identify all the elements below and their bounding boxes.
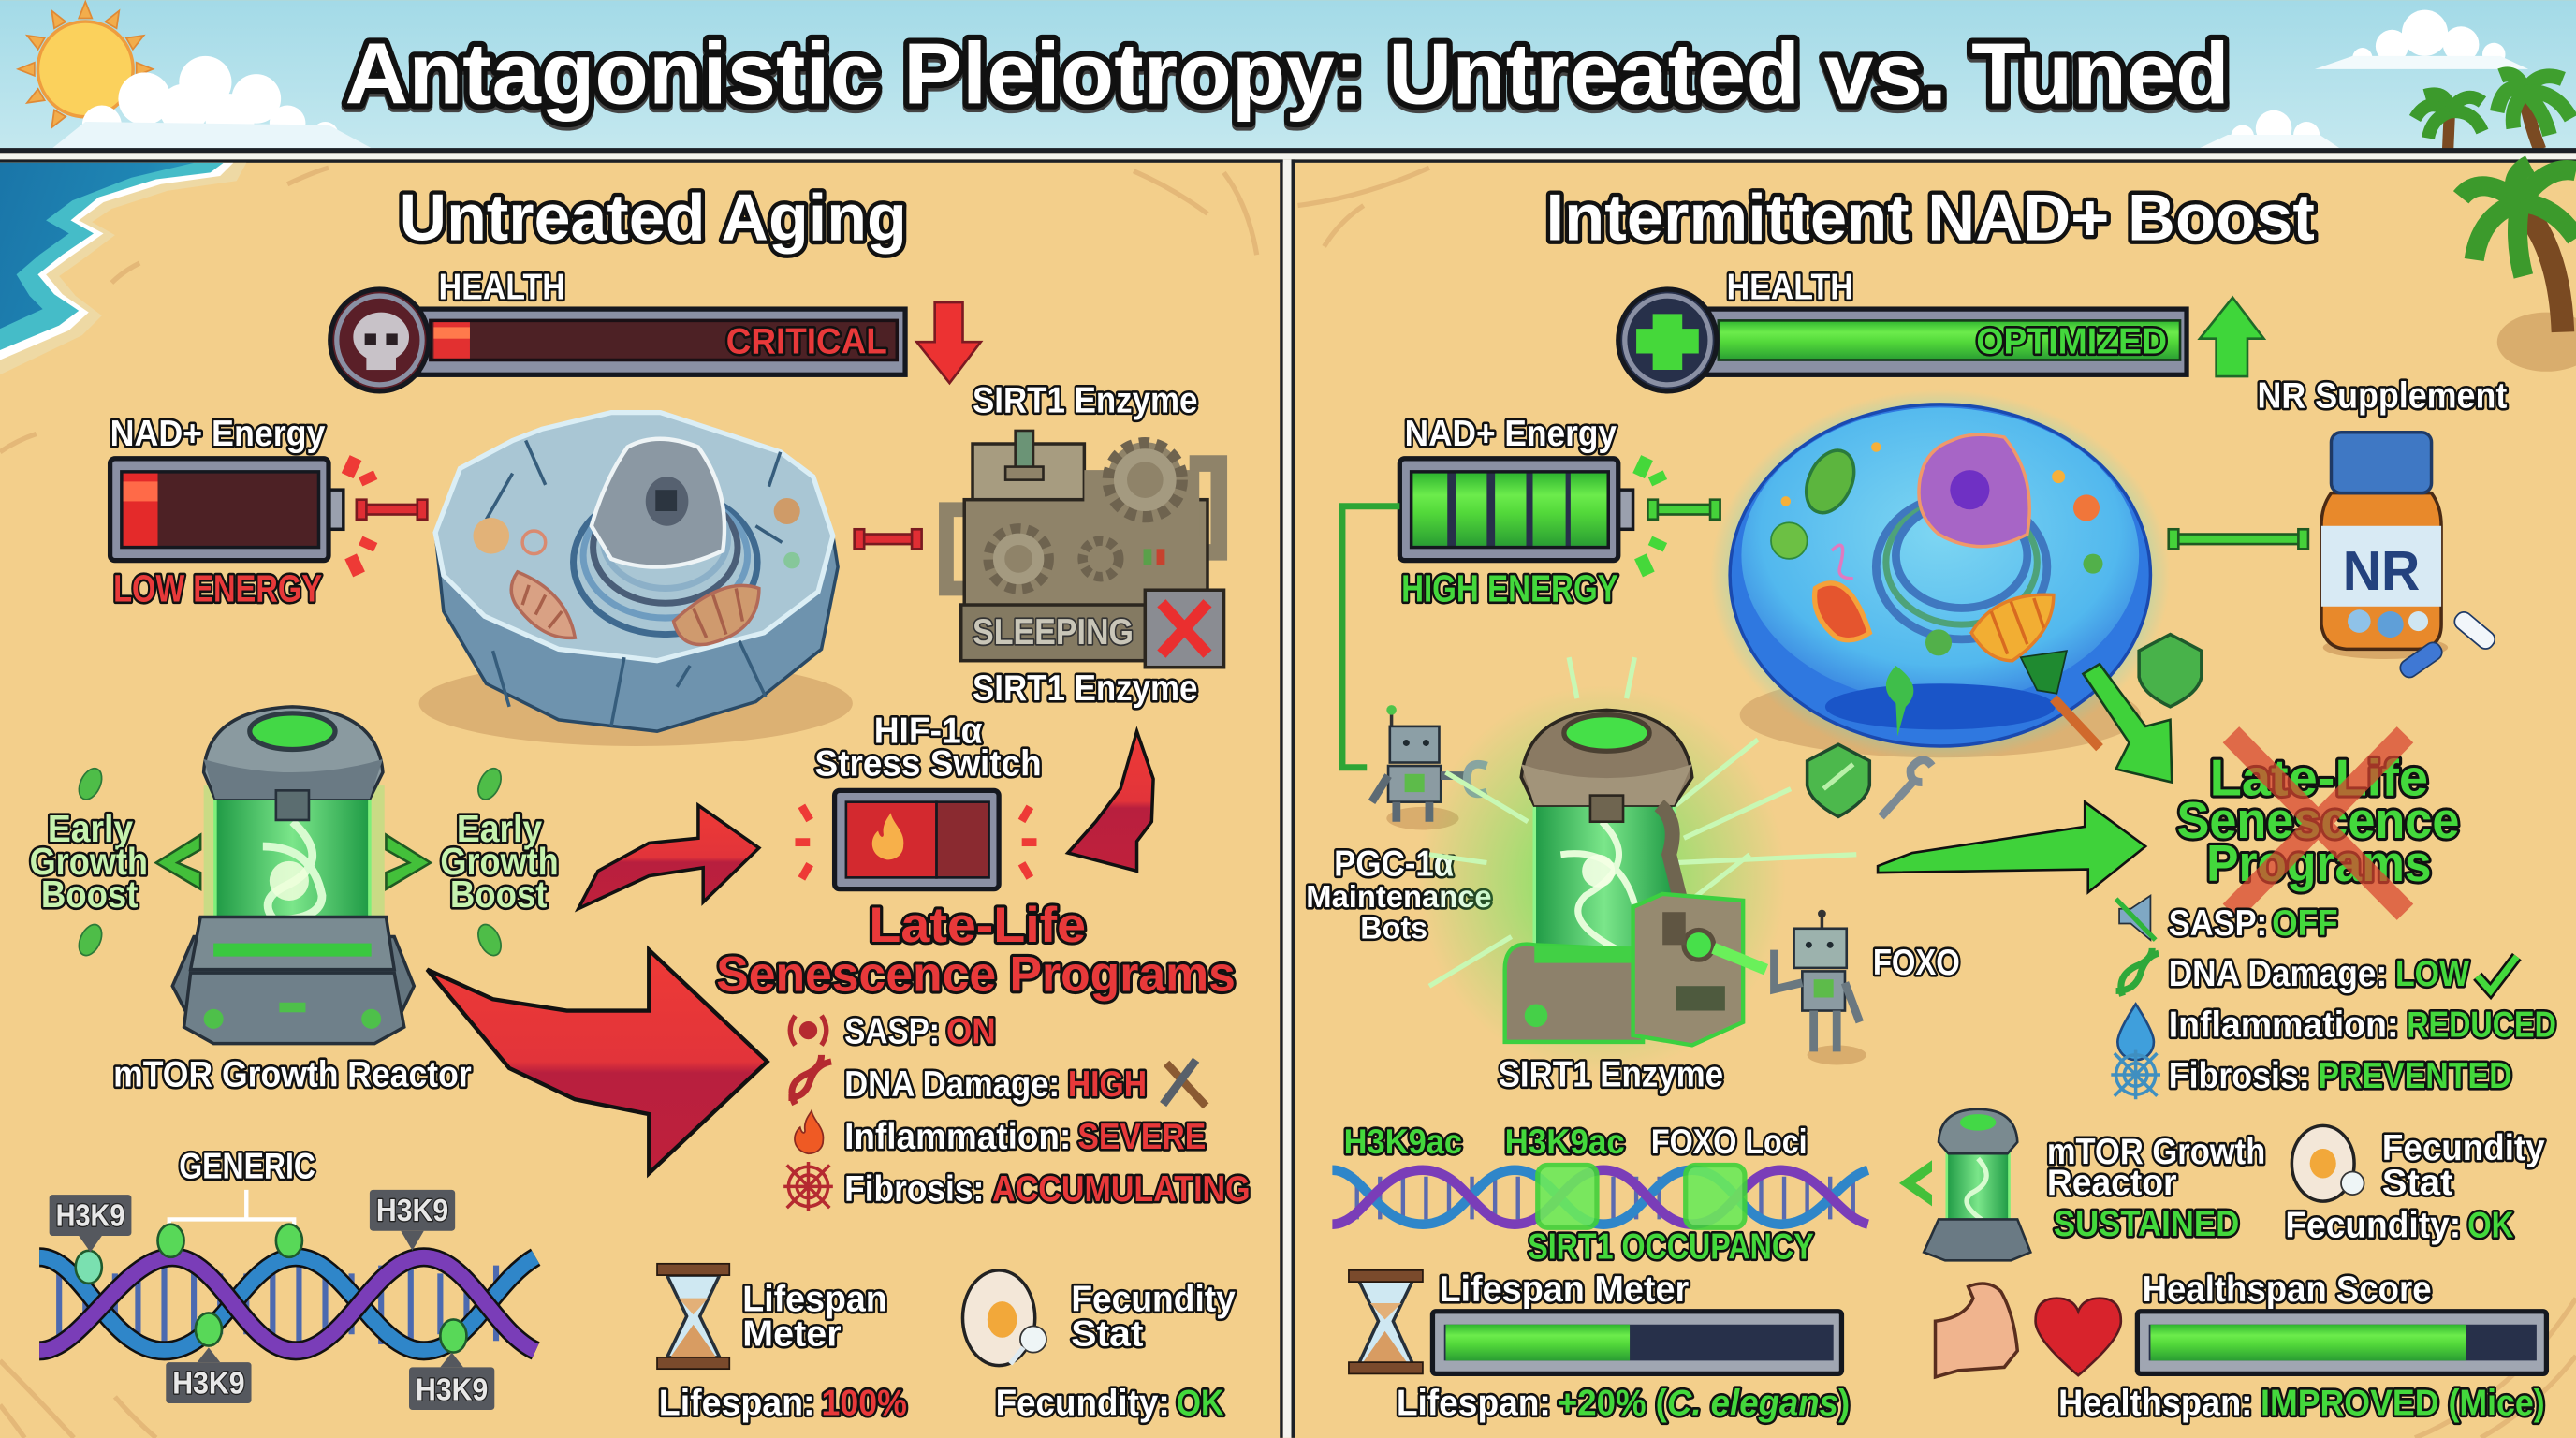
panel: untreated aging bbox=[0, 163, 1280, 1438]
dna: generic marks: GENERIC bbox=[179, 1147, 315, 1187]
label: PGC-1a maintenance bots: PGC-1α bbox=[1334, 844, 1455, 885]
cell: healthy bbox=[1710, 389, 2170, 761]
arrow: curved down to switch bbox=[1068, 731, 1153, 871]
health bar: optimized: HEALTH bbox=[1727, 268, 1853, 308]
row: SASP: SASP: bbox=[2169, 903, 2267, 944]
switch: HIF-1a bbox=[795, 790, 1036, 889]
label: early growth boost left: Early bbox=[48, 807, 134, 850]
arrow: diagonal green bbox=[2083, 664, 2172, 783]
bottle: NR supplement: NR Supplement bbox=[2258, 375, 2507, 416]
bottle: NR supplement bbox=[2258, 375, 2507, 681]
icons: leaves bbox=[75, 765, 505, 959]
panel: header sky bbox=[0, 0, 2576, 150]
icon: hourglass right bbox=[1349, 1270, 1423, 1373]
label: HIF-1a stress switch: HIF-1α bbox=[874, 711, 983, 751]
icon: water drop bbox=[2117, 1005, 2154, 1060]
label: early growth boost right bbox=[440, 807, 559, 916]
arrow: large red to senescence bbox=[427, 950, 768, 1173]
label: early growth boost left bbox=[30, 807, 148, 916]
cell: damaged bbox=[419, 413, 853, 746]
label: SIRT1 Enzyme bottom: SIRT1 Enzyme bbox=[973, 668, 1197, 709]
battery: high NAD+ energy: NAD+ Energy bbox=[1405, 414, 1617, 454]
list: senescence status bbox=[783, 1012, 1251, 1211]
stat: fecundity: OK bbox=[1177, 1383, 1224, 1423]
icon: egg right bbox=[2291, 1125, 2364, 1201]
row: inflammation: SEVERE bbox=[1077, 1117, 1206, 1157]
battery: high NAD+ energy: HIGH ENERGY bbox=[1401, 567, 1618, 610]
label: mTOR growth reactor sustained bbox=[2047, 1132, 2265, 1244]
row: fibrosis bbox=[2169, 1056, 2512, 1096]
label: FOXO: FOXO bbox=[1873, 943, 1960, 983]
connector: battery to maintenance bots bbox=[1342, 506, 1399, 768]
icon: check bbox=[2478, 957, 2517, 990]
icon: plus bbox=[1636, 314, 1699, 370]
icon: hammer bbox=[1164, 1060, 1206, 1106]
label: fecundity stat: Fecundity bbox=[1071, 1280, 1236, 1320]
icon: egg left bbox=[962, 1270, 1046, 1366]
health bar: critical: CRITICAL bbox=[726, 321, 887, 361]
heading: late-life senescence programs crossed bbox=[2177, 735, 2459, 912]
chevron: right growth bbox=[386, 835, 431, 889]
icon: web bbox=[2111, 1050, 2160, 1099]
meter: healthspan: Healthspan: bbox=[2058, 1383, 2252, 1423]
icon: flame in switch bbox=[872, 813, 903, 859]
tag: H3K9 one bbox=[50, 1195, 131, 1253]
label: fecundity stat: Stat bbox=[2382, 1163, 2453, 1203]
panel: intermittent NAD+ boost bbox=[1295, 163, 2576, 1438]
stat: fecundity: Fecundity: bbox=[996, 1383, 1170, 1423]
label: PGC-1a maintenance bots: Bots bbox=[1360, 911, 1427, 946]
label: mTOR growth reactor sustained: mTOR Growth bbox=[2047, 1132, 2265, 1172]
icon: skull bbox=[353, 313, 409, 370]
machine: sleeping SIRT1 bbox=[946, 431, 1224, 668]
connector: battery to cell bbox=[1647, 500, 1720, 520]
reactor: SIRT1 activated bbox=[1418, 657, 1856, 1073]
row: SASP: SASP: bbox=[844, 1012, 940, 1052]
row: inflammation bbox=[844, 1117, 1206, 1157]
health bar: optimized: OPTIMIZED bbox=[1976, 321, 2167, 361]
heading: untreated aging: Untreated Aging bbox=[399, 180, 907, 254]
label: mTOR growth reactor: mTOR Growth Reactor bbox=[113, 1054, 472, 1094]
meter: healthspan bbox=[2058, 1269, 2546, 1423]
label: fecundity stat: Fecundity: bbox=[2285, 1206, 2461, 1246]
stat: lifespan: Lifespan: bbox=[659, 1383, 815, 1423]
icon: left cloud bbox=[52, 56, 372, 148]
list: senescence status bbox=[2111, 896, 2556, 1099]
label: HIF-1a stress switch bbox=[815, 711, 1042, 785]
icon: heart bbox=[2036, 1299, 2121, 1375]
battery: high NAD+ energy bbox=[1399, 414, 1667, 610]
chevron: small left bbox=[1899, 1160, 1932, 1206]
row: fibrosis: Fibrosis: bbox=[2169, 1056, 2310, 1096]
meter: lifespan: Lifespan Meter bbox=[1439, 1269, 1689, 1310]
label: fecundity stat bbox=[2285, 1128, 2545, 1246]
icon: SASP signal bbox=[790, 1016, 827, 1045]
icon: magnifier bbox=[2054, 698, 2100, 748]
connector: battery inhibits cell bbox=[357, 500, 427, 520]
row: DNA damage: DNA Damage: bbox=[2169, 954, 2387, 994]
dna: generic marks bbox=[39, 1147, 535, 1410]
battery: low NAD+ energy: LOW ENERGY bbox=[113, 567, 322, 610]
label: SIRT1 enzyme: SIRT1 Enzyme bbox=[1499, 1054, 1723, 1094]
row: inflammation: Inflammation: bbox=[844, 1117, 1071, 1157]
heading: intermittent NAD+ boost: Intermittent NAD+ Boost bbox=[1546, 180, 2315, 254]
label: lifespan meter bbox=[742, 1280, 887, 1355]
panel divider bbox=[1280, 159, 1295, 1438]
icon: hourglass left bbox=[657, 1264, 729, 1369]
chevron: left growth bbox=[156, 835, 200, 889]
label: fecundity stat: Fecundity bbox=[2382, 1128, 2545, 1168]
dna: SIRT1 occupancy: H3K9ac bbox=[1344, 1123, 1462, 1161]
icon: right clouds bbox=[2200, 10, 2528, 148]
label: early growth boost left: Growth bbox=[30, 840, 148, 883]
row: fibrosis: PREVENTED bbox=[2318, 1056, 2512, 1096]
row: SASP: ON bbox=[946, 1012, 996, 1052]
health bar: optimized bbox=[1618, 268, 2187, 391]
row: SASP bbox=[2169, 903, 2338, 944]
reactor: mTOR growth bbox=[172, 707, 414, 1044]
meter: lifespan: +20% (C. elegans) bbox=[1558, 1383, 1850, 1423]
sand streaks right bbox=[1298, 168, 2576, 1438]
bottle: NR supplement: NR bbox=[2343, 539, 2420, 602]
meter: healthspan: Healthspan Score bbox=[2143, 1269, 2432, 1310]
label: PGC-1a maintenance bots bbox=[1306, 844, 1492, 946]
row: DNA damage: LOW bbox=[2395, 954, 2469, 994]
icon: shield by cell bbox=[2139, 635, 2202, 707]
stat: lifespan: 100% bbox=[822, 1383, 907, 1423]
heading: late-life senescence programs bbox=[716, 898, 1236, 1002]
icon: red cross bbox=[2231, 735, 2405, 912]
connector: cell inhibits SIRT1 bbox=[855, 529, 922, 549]
arrow: health up bbox=[2200, 298, 2264, 376]
label: HIF-1a stress switch: Stress Switch bbox=[815, 744, 1042, 785]
heading: late-life senescence programs: Senescence Programs bbox=[716, 946, 1236, 1002]
row: DNA damage: DNA Damage: bbox=[844, 1064, 1060, 1105]
tag: H3K9 one: H3K9 bbox=[56, 1198, 124, 1233]
connector: supplement to cell bbox=[2169, 529, 2308, 549]
icon: sun bbox=[18, 2, 153, 131]
arrow: curved to switch bbox=[578, 805, 759, 909]
dna: SIRT1 occupancy bbox=[1332, 1123, 1868, 1268]
row: fibrosis: Fibrosis: bbox=[844, 1169, 984, 1210]
heading: late-life senescence programs: Late-Life bbox=[869, 898, 1086, 953]
reactor: small mTOR bbox=[1924, 1109, 2030, 1260]
label: lifespan meter: Lifespan bbox=[742, 1280, 887, 1320]
header divider bbox=[0, 148, 2576, 163]
label: PGC-1a maintenance bots: Maintenance bbox=[1306, 880, 1492, 915]
robot: FOXO bbox=[1775, 910, 1866, 1064]
robot: PGC-1a maintenance bot bbox=[1372, 705, 1486, 829]
meter: lifespan bbox=[1397, 1269, 1850, 1423]
battery: low NAD+ energy: NAD+ Energy bbox=[110, 414, 326, 454]
machine: sleeping SIRT1: SLEEPING bbox=[973, 612, 1134, 653]
label: lifespan meter: Meter bbox=[742, 1314, 842, 1355]
heading: late-life senescence programs crossed: Programs bbox=[2206, 835, 2432, 892]
stat: lifespan bbox=[659, 1383, 907, 1423]
health bar: critical bbox=[330, 268, 905, 391]
row: fibrosis bbox=[844, 1169, 1251, 1210]
icon: muscle arm bbox=[1936, 1284, 2017, 1377]
row: inflammation: Inflammation: bbox=[2169, 1005, 2398, 1046]
row: DNA damage: HIGH bbox=[1068, 1064, 1147, 1105]
tag: H3K9 three bbox=[166, 1347, 252, 1403]
dna: SIRT1 occupancy: SIRT1 OCCUPANCY bbox=[1528, 1227, 1814, 1268]
icon: wrench bbox=[1881, 760, 1932, 816]
tag: H3K9 two: H3K9 bbox=[376, 1194, 448, 1228]
label: early growth boost left: Boost bbox=[41, 873, 138, 916]
heading: late-life senescence programs crossed: Late-Life bbox=[2210, 750, 2428, 807]
label: fecundity stat: OK bbox=[2467, 1206, 2513, 1246]
icon: damaged DNA bbox=[788, 1055, 831, 1105]
label: early growth boost right: Early bbox=[457, 807, 543, 850]
label: mTOR growth reactor sustained: Reactor bbox=[2047, 1163, 2177, 1203]
label: early growth boost right: Boost bbox=[450, 873, 547, 916]
icon: muted speaker bbox=[2116, 896, 2156, 940]
label: fecundity stat bbox=[1071, 1280, 1236, 1355]
icon: flame bbox=[795, 1111, 823, 1153]
tag: H3K9 two bbox=[370, 1190, 455, 1251]
row: fibrosis: ACCUMULATING bbox=[992, 1169, 1251, 1210]
label: mTOR growth reactor sustained: SUSTAINED bbox=[2054, 1204, 2239, 1244]
meter: healthspan: IMPROVED (Mice) bbox=[2261, 1383, 2545, 1423]
icon: repaired DNA bbox=[2116, 948, 2159, 996]
sand streaks bbox=[0, 168, 1257, 1438]
tag: H3K9 three: H3K9 bbox=[172, 1366, 245, 1401]
tag: H3K9 four bbox=[409, 1353, 494, 1410]
beach water bbox=[0, 163, 246, 374]
arrow: green to senescence bbox=[1878, 802, 2145, 892]
icon: pills bbox=[2397, 609, 2498, 681]
tag: H3K9 four: H3K9 bbox=[416, 1372, 488, 1407]
label: early growth boost right: Growth bbox=[440, 840, 559, 883]
icon: shield bbox=[1808, 744, 1869, 816]
dna: SIRT1 occupancy: H3K9ac bbox=[1505, 1123, 1625, 1161]
row: SASP: OFF bbox=[2272, 903, 2338, 944]
heading: late-life senescence programs crossed: Senescence bbox=[2177, 792, 2459, 849]
label: fecundity stat: Stat bbox=[1071, 1314, 1144, 1355]
dna: SIRT1 occupancy: FOXO Loci bbox=[1651, 1123, 1808, 1161]
battery: low NAD+ energy bbox=[110, 414, 377, 610]
label: SIRT1 Enzyme top: SIRT1 Enzyme bbox=[973, 381, 1197, 421]
title: Antagonistic Pleiotropy: Untreated vs. Tuned bbox=[345, 25, 2230, 123]
icon: fibrosis web bbox=[783, 1162, 833, 1211]
icon: header palm trees bbox=[2415, 74, 2571, 150]
health bar: critical: HEALTH bbox=[439, 268, 565, 308]
palm tree bbox=[2461, 165, 2576, 372]
meter: lifespan: Lifespan: bbox=[1397, 1383, 1551, 1423]
arrow: health down bbox=[916, 302, 981, 383]
row: inflammation bbox=[2169, 1005, 2556, 1046]
